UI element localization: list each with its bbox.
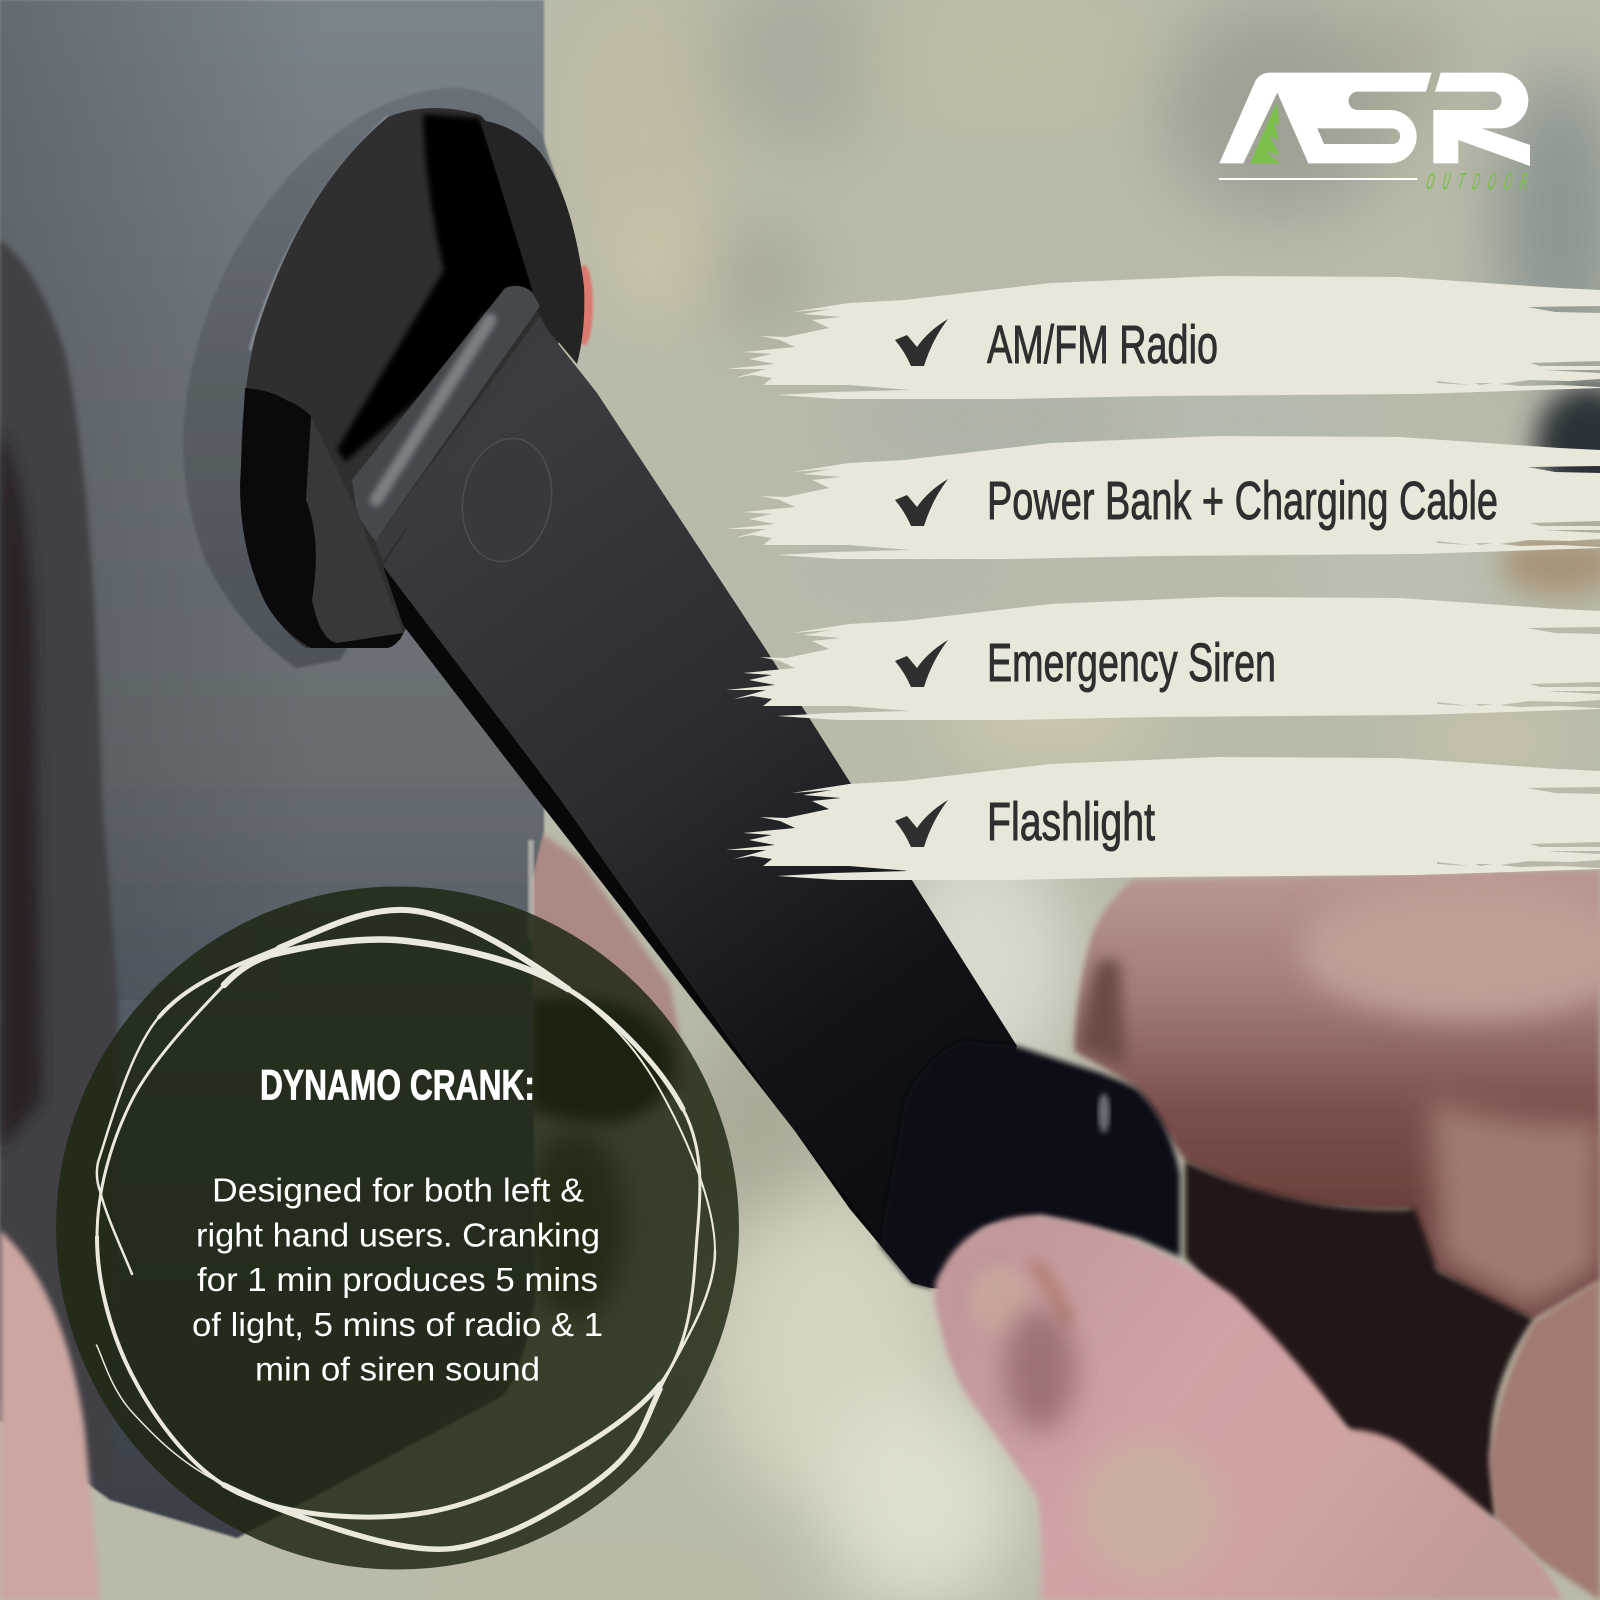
hand: palm xyxy=(1075,870,1600,1319)
feature: Emergency Siren: Emergency Siren xyxy=(987,633,1276,693)
feature: AM/FM Radio xyxy=(726,276,1600,399)
left finger xyxy=(0,1230,100,1600)
device body xyxy=(0,0,544,1538)
callout body text xyxy=(192,1172,603,1388)
shadow blobs behind device xyxy=(525,997,673,1320)
feature: Emergency Siren xyxy=(726,597,1600,720)
dark callout circle xyxy=(56,886,739,1570)
crank socket ring xyxy=(183,87,584,668)
callout body text: right hand users. Cranking xyxy=(196,1216,600,1254)
feature: Flashlight xyxy=(726,757,1600,880)
callout body text: of light, 5 mins of radio & 1 xyxy=(192,1306,603,1343)
crank pivot bar xyxy=(352,286,548,561)
callout body text: min of siren sound xyxy=(255,1350,540,1388)
hand: lower right finger xyxy=(1489,1280,1600,1600)
red fingertip behind disc xyxy=(575,265,593,345)
hand: thumb xyxy=(935,1216,1563,1600)
hand: deep shadow between fingers xyxy=(1185,1161,1534,1520)
callout body text: for 1 min produces 5 mins xyxy=(197,1261,598,1298)
ASR Outdoor logo: OUTDOOR xyxy=(1424,169,1531,194)
finger behind device xyxy=(530,825,690,1120)
feature: AM/FM Radio: AM/FM Radio xyxy=(987,315,1218,375)
crank lobe xyxy=(240,388,403,648)
scribble ring around callout xyxy=(96,910,715,1549)
crank knob xyxy=(880,1041,1180,1288)
feature: Flashlight: Flashlight xyxy=(987,792,1155,852)
crank handle xyxy=(383,322,1017,1290)
ASR Outdoor logo xyxy=(1219,73,1531,194)
feature: Power Bank + Charging Cable xyxy=(726,436,1600,559)
callout body text: Designed for both left & xyxy=(212,1172,584,1208)
callout heading: DYNAMO CRANK: xyxy=(260,1062,535,1110)
